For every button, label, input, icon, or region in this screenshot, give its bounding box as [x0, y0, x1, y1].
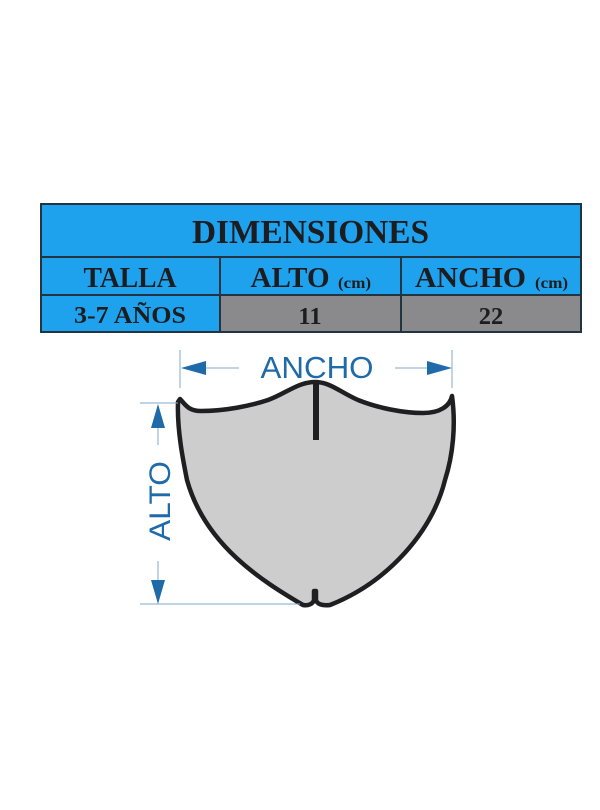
table header: DIMENSIONES — [41, 204, 581, 257]
column heading: ALTO (cm) — [220, 257, 401, 295]
column heading: ALTO (cm): ALTO — [250, 263, 330, 294]
height value: 11 — [220, 295, 401, 332]
face mask diagram — [178, 382, 454, 605]
width dimension: ANCHO — [180, 350, 452, 388]
label: ANCHO: ANCHO — [260, 350, 374, 385]
column heading: ALTO (cm): (cm) — [338, 275, 371, 292]
column heading: ANCHO (cm) — [401, 257, 581, 295]
width value: 22 — [401, 295, 581, 332]
column heading: ANCHO (cm): ANCHO — [415, 263, 526, 294]
column heading: TALLA — [41, 257, 220, 295]
column heading: TALLA: TALLA — [84, 263, 177, 294]
right arrow — [395, 361, 452, 375]
left arrow — [181, 361, 239, 375]
down arrow — [151, 561, 165, 604]
width value: 22: 22 — [479, 303, 503, 330]
up arrow — [151, 404, 165, 445]
mask centre seam — [313, 384, 319, 440]
table header: DIMENSIONES: DIMENSIONES — [192, 214, 429, 251]
height dimension: ALTO — [140, 403, 300, 604]
column heading: ANCHO (cm): (cm) — [535, 275, 568, 292]
size value: 3-7 AÑOS — [41, 295, 220, 332]
mask shape — [178, 382, 454, 605]
dimensions table — [41, 204, 581, 332]
size value: 3-7 AÑOS: 3-7 AÑOS — [74, 301, 186, 329]
height value: 11: 11 — [298, 303, 322, 330]
label: ALTO: ALTO — [144, 461, 177, 541]
